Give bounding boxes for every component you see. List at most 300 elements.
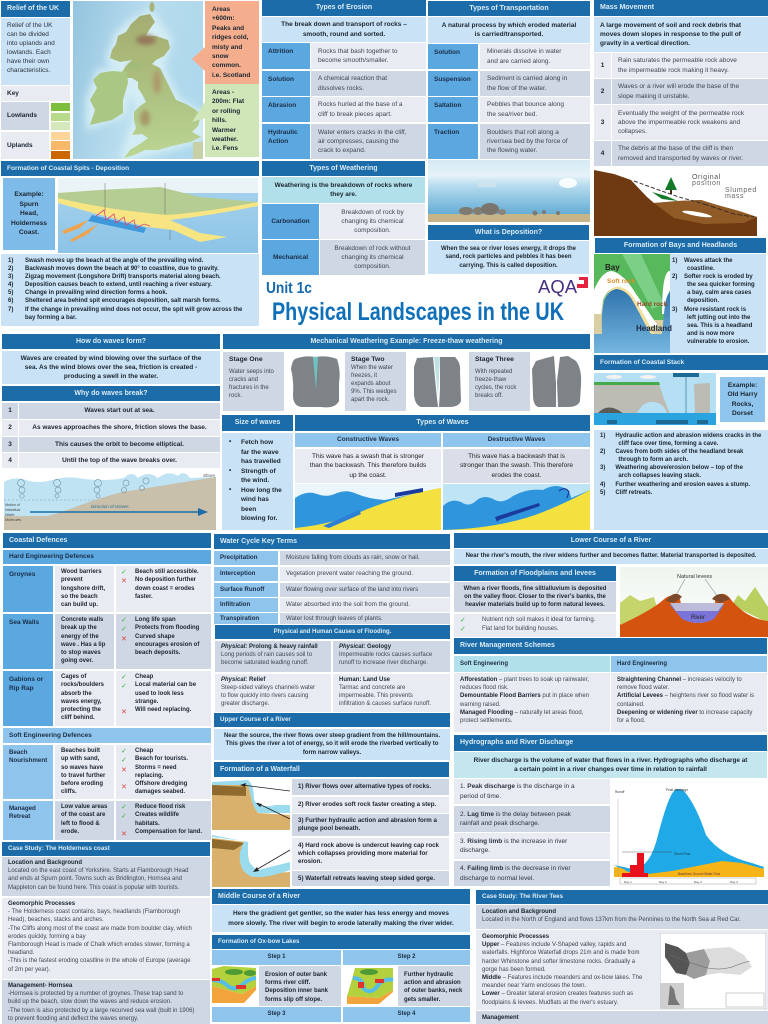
management: -Hornsea is protected by a number of groynes. These trap sand to xyxy=(8,991,183,997)
diagram: waves approaching the shore: Water xyxy=(5,513,15,517)
example: Spurn Head xyxy=(3,178,55,250)
text: sea. As the wind blows over the sea, friction is created - xyxy=(25,364,197,371)
key: upland swatch light xyxy=(51,132,70,140)
definition: infiltration: Water absorbed into the soil from the ground. xyxy=(286,601,410,608)
item 2 xyxy=(454,806,610,832)
step markers and text xyxy=(8,258,14,313)
row number 3: 3 xyxy=(601,119,604,126)
stage two title: Stage Two xyxy=(351,356,384,363)
chart: storm hydrograph: Day 3 xyxy=(694,880,702,884)
steps: 4) Further weathering and erosion eaves a stump. xyxy=(600,482,750,488)
cause: geology: Physical: Geology xyxy=(339,644,391,650)
geomorphic processes: floodplains & levees. Mudflats at the river's estuary. xyxy=(482,1000,618,1006)
text: groynes xyxy=(55,566,114,612)
row label: traction: Traction xyxy=(434,129,459,136)
bullets: • xyxy=(229,466,231,474)
bullets xyxy=(229,438,232,492)
diagram: destructive wave xyxy=(443,484,590,530)
heading xyxy=(428,1,590,16)
text: Protects from flooding xyxy=(135,625,199,631)
text xyxy=(454,582,616,612)
title block xyxy=(266,276,588,326)
step text: Zigzag movement (Longshore Drift) transports material along beach. xyxy=(25,274,221,280)
step 4 heading xyxy=(343,1007,470,1022)
label: managed retreat xyxy=(3,801,53,840)
logo: AQA: AQA xyxy=(538,276,577,297)
heading: What is Deposition? xyxy=(475,229,542,236)
diagram: constructive wave xyxy=(295,484,441,530)
row text: suspension: the flow of the water. xyxy=(487,84,547,92)
example: Old Harry Rocks: Example: xyxy=(728,382,757,389)
intro: A large movement of soil and rock debris that xyxy=(600,22,741,29)
pros and cons: managed retreat xyxy=(116,801,211,840)
heading xyxy=(454,638,767,654)
intro xyxy=(262,17,426,42)
text: strange. xyxy=(135,699,158,705)
steps: 5) Cliff retreats. xyxy=(600,490,652,496)
row number 3 xyxy=(2,437,18,452)
constructive text: This wave has a swash that is stronger xyxy=(312,453,424,460)
label: groynes: Groynes xyxy=(9,571,35,578)
steps xyxy=(1,254,259,326)
text: beach nourishment: before eroding xyxy=(61,781,103,787)
management: build up the beach, slow down the waves and reduce erosion. xyxy=(8,999,172,1005)
row text 4: removed and transported by waves or river. xyxy=(618,154,743,162)
callout body: +600m: xyxy=(212,15,235,22)
step markers and text: 3) xyxy=(8,274,13,280)
callout body: Warmer xyxy=(212,127,236,134)
geomorphic processes: Geomorphic Processes xyxy=(8,901,75,907)
diagram: waves approaching the shore: Direction of Waves xyxy=(91,504,129,509)
diagram: waves approaching the shore xyxy=(4,473,216,530)
text: step 2: Further hydraulic xyxy=(404,972,453,978)
step 4: which collapses providing more material for xyxy=(298,850,428,857)
stage one text: rock. xyxy=(229,393,242,399)
chart: storm hydrograph: Runoff xyxy=(615,790,624,794)
panel: size of waves xyxy=(222,415,293,530)
key heading: Key xyxy=(7,90,19,97)
text: producing a swell in the water. xyxy=(64,373,158,380)
step 5 xyxy=(292,871,449,886)
step markers and text: 1) xyxy=(8,258,13,264)
cause: prolonged rainfall: become saturated leading runoff. xyxy=(221,660,309,666)
cause: prolonged rainfall xyxy=(215,641,331,672)
management: Management xyxy=(482,1015,519,1021)
heading xyxy=(2,386,220,401)
cause: prolonged rainfall: Physical: Prolong & heavy rainfall xyxy=(221,644,318,650)
heading xyxy=(454,735,767,751)
intro: moves down slopes in response to the pull of xyxy=(600,31,741,38)
step markers and text: 6) xyxy=(8,298,13,304)
heading: Formation of Bays and Headlands xyxy=(624,242,737,249)
diagram: waterfall later stage xyxy=(212,834,290,887)
heading: Coastal Defences xyxy=(9,537,67,544)
panel: formation of bays and headlands xyxy=(594,238,766,353)
callout body: i.e. Scotland xyxy=(212,72,250,79)
label: gabions xyxy=(3,671,53,726)
soft engineering text xyxy=(454,673,610,732)
panel: how do waves form xyxy=(2,334,220,384)
pros and cons: sea walls xyxy=(116,614,211,669)
label: beach nourishment: Beach xyxy=(9,749,28,756)
intro xyxy=(428,17,590,43)
heading: Formation of a Waterfall xyxy=(220,766,300,773)
item 3 xyxy=(454,833,610,859)
definition: interception: Vegetation prevent water reaching the ground. xyxy=(286,570,413,577)
text: habitats. xyxy=(135,821,160,827)
term: surface runoff: Surface Runoff xyxy=(220,586,264,593)
panel: case study River Tees xyxy=(476,890,768,1024)
label: gabions: Rip Rap xyxy=(9,685,34,692)
term: infiltration: Infiltration xyxy=(220,601,250,608)
step 2: 2) River erodes soft rock faster creating a step. xyxy=(298,801,436,808)
step 5: 5) Waterfall retreats leaving steep sided gorge. xyxy=(298,875,435,882)
text: groynes: can build up. xyxy=(61,602,98,608)
key: lowlands xyxy=(1,102,49,130)
text: beach nourishment xyxy=(55,745,114,799)
chart: storm hydrograph xyxy=(612,785,768,887)
step text: bay forming a bar. xyxy=(25,315,77,321)
definition: transpiration xyxy=(280,613,450,624)
step 2 heading xyxy=(343,950,470,965)
text: relief intro: Relief of the UK xyxy=(7,22,53,29)
stage two text: apart the rock. xyxy=(351,397,389,403)
row text 1: Waves start out at sea. xyxy=(84,407,155,414)
stage one xyxy=(223,352,284,411)
row text: suspension xyxy=(480,71,590,96)
steps: 1) Hydraulic action and abrasion widens cracks in the xyxy=(600,433,761,439)
text: managed retreat: of the coast are xyxy=(61,812,105,818)
text: Creates wildlife xyxy=(135,812,179,818)
cause: geology: runoff to increase river discharge. xyxy=(339,660,428,666)
cause: land use: infiltration & causes surface runoff. xyxy=(339,701,431,707)
chart: storm hydrograph: Day 4 xyxy=(730,880,738,884)
geomorphic processes: -This is the fastest eroding coastline in the whole of Europe (average xyxy=(8,958,190,964)
heading xyxy=(223,334,590,349)
management: Management- Hornsea xyxy=(8,983,72,989)
key: upland swatch mid xyxy=(51,141,70,150)
management: to prevent flooding and deflect the waves energy. xyxy=(8,1016,138,1022)
step markers and text: 5) xyxy=(8,290,13,296)
stage one text xyxy=(229,368,274,399)
text: Beach still accessible. xyxy=(135,569,199,575)
row text: solution xyxy=(480,44,590,69)
row text 3: above the impermeable rock weakens and xyxy=(618,119,740,126)
location xyxy=(2,857,210,896)
text: Waves are created by wind blowing over the surface of the xyxy=(21,355,201,362)
marks: ✕ xyxy=(121,708,127,716)
row label: carbonation: Carbonation xyxy=(271,218,310,225)
heading xyxy=(594,0,768,16)
chart: storm hydrograph: Day 2 xyxy=(659,880,667,884)
row text: saltation: the sea/river bed. xyxy=(487,110,537,118)
row label: hydraulic action: Action xyxy=(268,138,288,145)
row text: hydraulic action: Water enters cracks in the cliff, xyxy=(318,129,407,136)
text: managed retreat: left to flood & xyxy=(61,821,100,827)
step 4 heading: Step 4 xyxy=(397,1011,416,1017)
intro xyxy=(594,17,768,52)
step markers and text: 4) xyxy=(8,282,13,288)
marks: ✓ xyxy=(121,682,127,690)
row number 2: 2 xyxy=(8,424,12,431)
key: uplands xyxy=(1,132,49,159)
row label: hydraulic action: Hydraulic xyxy=(268,129,298,136)
row text 2 xyxy=(612,79,768,104)
steps xyxy=(670,254,766,353)
text: damages seabed. xyxy=(135,789,185,795)
row label: solution xyxy=(428,44,478,69)
hard engineering text: remove flood water. xyxy=(617,685,669,691)
key: lowland swatch dark xyxy=(51,103,70,111)
heading: Formation of Coastal Stack xyxy=(600,359,684,366)
row text: attrition: Rocks that bash together to xyxy=(318,48,398,55)
text: When a river floods, fine silt/alluvium is deposited xyxy=(464,586,606,592)
key: lowlands: Lowlands xyxy=(7,112,37,119)
term: interception xyxy=(214,567,278,581)
marks xyxy=(121,673,131,715)
example: Spurn Head: Coast. xyxy=(19,229,39,236)
text: This gives the river a lot of energy, so it will erode the riverbed vertically to xyxy=(226,741,438,747)
chart: storm hydrograph: Day 1 xyxy=(624,880,632,884)
text: gabions: waves energy, xyxy=(61,699,102,705)
row text 1: Rain saturates the permeable rock above xyxy=(618,57,737,64)
soft engineering text: Managed Flooding – naturally let areas flood, xyxy=(460,710,583,716)
cause: land use: impermeable. This prevents xyxy=(339,693,413,699)
diagram: waterfall early stage xyxy=(212,777,290,830)
intro: is carried/transported. xyxy=(475,31,543,38)
row text 1: the impermeable rock making it heavy. xyxy=(618,66,729,74)
definition: transpiration: Water lost through leaves of plants. xyxy=(286,615,383,622)
intro xyxy=(454,752,767,778)
stage three text: With repeated xyxy=(475,369,512,375)
hard engineering text: Artificial Levees – heightens river so flood water is xyxy=(617,693,754,699)
marks: ✕ xyxy=(121,635,127,643)
text: used to look less xyxy=(135,691,184,697)
heading xyxy=(1,161,259,176)
row text: carbonation xyxy=(320,204,425,239)
text: Near the river's mouth, the river widens further and becomes flatter. Material transported is deposited. xyxy=(466,553,756,559)
soft engineering heading xyxy=(454,656,610,672)
row text: carbonation: Breakdown of rock by xyxy=(341,209,404,216)
bullet text: Strength of xyxy=(241,468,276,474)
text: sea walls: Concrete walls xyxy=(61,617,103,623)
list xyxy=(222,433,293,530)
panel: types of erosion xyxy=(262,0,426,159)
panel: formation of coastal spits xyxy=(1,161,259,326)
callout body xyxy=(205,1,259,84)
step text: Backwash moves down the beach at 90° to coastline, due to gravity. xyxy=(25,266,219,272)
row label: saltation xyxy=(428,97,478,122)
step markers and text: 7) xyxy=(8,307,13,313)
row number 1: 1 xyxy=(601,62,604,69)
step text xyxy=(25,258,242,321)
example: Old Harry Rocks: Rocks, xyxy=(732,400,753,408)
management: -The town is also protected by a large recurved sea wall (built in 1906) xyxy=(8,1008,194,1014)
diagram: coastal spit xyxy=(58,178,258,253)
destructive text: stronger than the swash. This therefore xyxy=(460,462,573,469)
heading: Types of Transportation xyxy=(469,5,549,12)
diagram: bay and headland: Hard rock xyxy=(637,301,668,308)
definition: surface runoff xyxy=(280,583,450,597)
step 3 heading: Step 3 xyxy=(267,1011,286,1017)
destructive heading: Destructive Waves xyxy=(488,436,545,443)
step 1 xyxy=(292,779,449,795)
marks: ✓ xyxy=(121,812,127,820)
example: Spurn Head: Holderness xyxy=(11,220,47,227)
soft engineering text: protect settlements. xyxy=(460,718,512,724)
item 3: discharge. xyxy=(460,847,490,854)
row text 4 xyxy=(19,453,220,468)
step 2 heading: Step 2 xyxy=(397,954,416,960)
text: sea walls: break up the xyxy=(61,625,97,631)
text: gabions: Cages of xyxy=(61,674,86,680)
diagram: bay and headland: Bay xyxy=(605,263,620,272)
diagram: waves approaching the shore: Motion of xyxy=(5,503,21,507)
row number 4 xyxy=(594,141,611,166)
panel: water cycle key terms xyxy=(214,534,450,624)
main title: Physical Landscapes in the UK xyxy=(272,298,564,326)
location xyxy=(476,905,768,929)
geomorphic processes: Head), beaches, stacks and arches. xyxy=(8,917,104,923)
geomorphic processes: meander near Yarm encloses the town. xyxy=(482,983,586,989)
text: Compensation for land. xyxy=(135,829,202,835)
diagram: natural levees: River xyxy=(691,615,705,621)
text: step 2: of outer banks, neck xyxy=(404,988,462,994)
constructive heading xyxy=(295,433,441,447)
heading: Types of Waves xyxy=(416,419,469,426)
text xyxy=(214,729,450,760)
heading xyxy=(3,533,211,548)
step 1 heading: Step 1 xyxy=(267,954,286,960)
item 4 xyxy=(454,861,610,886)
step text: Change in prevailing wind direction forms a hook. xyxy=(25,290,167,296)
text: No deposition further xyxy=(135,577,196,583)
steps: the sea quicker forming xyxy=(687,282,755,288)
item 2: rainfall and peak discharge. xyxy=(460,820,540,827)
text: step 2: action and abrasion xyxy=(404,980,461,986)
heading xyxy=(454,533,768,548)
heading: Upper Course of a River xyxy=(220,716,291,723)
text: Near the source, the river flows over steep gradient from the hill/mountains. xyxy=(224,733,440,739)
term: surface runoff xyxy=(214,583,278,597)
stage one text: cracks and xyxy=(229,377,258,383)
bullet text: far the wave xyxy=(241,448,279,456)
callout body: 200m: Flat xyxy=(212,98,244,105)
text xyxy=(2,351,220,384)
heading xyxy=(595,238,766,253)
cause: land use: Human: Land Use xyxy=(339,677,390,683)
geomorphic processes: - The Holderness coast contains, bays, headlands (Flamborough xyxy=(8,909,180,915)
marks: ✕ xyxy=(121,766,127,774)
row text 2: As waves approaches the shore, friction slows the base. xyxy=(32,424,207,431)
panel: case study Holderness coast xyxy=(2,842,210,1024)
text: step 1: Deposition inner bank xyxy=(265,988,328,994)
marks: ✓ xyxy=(121,756,127,764)
text: step 1: forms river cliff. xyxy=(265,980,310,986)
steps: 3) Weathering above/erosion below – top of the xyxy=(600,465,743,471)
definition: infiltration xyxy=(280,598,450,612)
heading xyxy=(454,566,616,581)
stage three xyxy=(469,352,530,411)
row number 4: 4 xyxy=(601,150,604,157)
diagram: slump mass movement xyxy=(594,170,757,236)
constructive text xyxy=(295,449,441,483)
panel: types of waves xyxy=(295,415,590,530)
stage one text: fractures in the xyxy=(229,385,269,391)
steps: 2) Softer rock is eroded by xyxy=(672,274,753,280)
example: Old Harry Rocks: Dorset xyxy=(732,410,753,417)
management xyxy=(476,1011,768,1024)
step 4: 4) Hard rock above is undercut leaving cap rock xyxy=(298,842,439,849)
text: beach deposits. xyxy=(135,650,180,656)
constructive text: than the backwash. This therefore builds xyxy=(310,462,426,469)
cause: land use: Tarmac and concrete are xyxy=(339,685,405,691)
benefits text xyxy=(482,616,614,636)
row text 4 xyxy=(612,141,768,166)
text: Cheap xyxy=(135,748,153,754)
example: Old Harry Rocks: Old Harry xyxy=(727,391,758,398)
row label: attrition xyxy=(262,43,310,69)
diagram: transportation in the sea xyxy=(428,160,590,222)
cause: land use xyxy=(333,674,450,712)
heading: Lower Course of a River xyxy=(571,537,651,544)
row label: mechanical: Mechanical xyxy=(273,254,308,261)
text: relief intro: can be divided xyxy=(7,31,49,38)
text: Offshore dredging xyxy=(135,781,187,787)
heading: Why do waves break? xyxy=(74,390,148,397)
stage three text: freeze-thaw xyxy=(475,377,506,383)
heading: Formation of Floodplains and levees xyxy=(474,570,596,577)
text: carrying. This is called deposition. xyxy=(459,263,558,269)
row label: suspension xyxy=(428,71,478,96)
example: Spurn Head: Head, xyxy=(20,210,38,217)
text: managed retreat xyxy=(55,801,114,840)
step 4: erosion. xyxy=(298,858,322,865)
location: Location and Background xyxy=(8,860,82,866)
row label: hydraulic action xyxy=(262,124,310,159)
soft engineering text: warning raised. xyxy=(460,702,501,708)
heading: Types of Weathering xyxy=(309,165,378,172)
key: lowland swatch mid xyxy=(51,113,70,121)
callout body: hills. xyxy=(212,117,227,124)
diagram: natural levees: Natural levees xyxy=(677,574,712,580)
steps: and is now more xyxy=(687,331,734,337)
heading: Size of waves xyxy=(235,419,280,426)
cause: relief: Physical: Relief xyxy=(221,677,265,683)
heading xyxy=(214,762,449,777)
key: uplands: Uplands xyxy=(7,142,33,149)
geomorphic processes xyxy=(2,898,210,979)
row text: solution: and are carried along. xyxy=(487,58,550,64)
row label: solution xyxy=(262,71,310,96)
step 4 xyxy=(292,838,449,870)
panel: river management schemes xyxy=(454,638,768,733)
text: beach nourishment: cliffs. xyxy=(61,789,77,795)
callout pointer xyxy=(192,47,205,71)
step text: Sheltered area behind spit encourages deposition, salt marsh forms. xyxy=(25,298,221,304)
marks: ✓ xyxy=(121,673,127,681)
callout body: common. xyxy=(212,62,241,69)
label: managed retreat: Retreat xyxy=(9,813,30,820)
step 3: 3) Further hydraulic action and abrasion form a xyxy=(298,817,437,824)
text: Beach for tourists. xyxy=(135,756,188,762)
item 1: 1. Peak discharge is the discharge in a xyxy=(460,783,575,790)
hard engineering text: Straightening Channel – increases velocity to xyxy=(617,677,742,683)
text: sea walls: going over. xyxy=(61,658,93,664)
geomorphic processes: waterfalls. Highforce Waterfall drops 21m and is made from xyxy=(482,950,640,956)
callout pointer xyxy=(192,102,205,122)
stage two text: When the water xyxy=(351,365,393,371)
